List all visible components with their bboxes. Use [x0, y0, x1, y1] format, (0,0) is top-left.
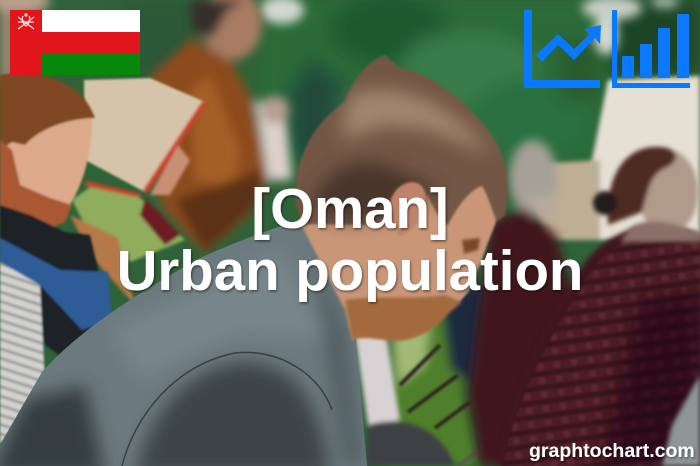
- foreground man: ear: [390, 182, 425, 236]
- watermark: graphtochart.com: [529, 440, 695, 462]
- background: grey sleeve bottom right: [662, 375, 700, 466]
- foreground man: face and beard: [300, 170, 501, 341]
- background: grass and chairs: [380, 285, 500, 466]
- background figure: red-haired man: [0, 73, 112, 445]
- icon: Omani emblem: [18, 14, 34, 29]
- background figure: woven bundle with red trim: [70, 78, 205, 305]
- flag of Oman: [10, 10, 140, 75]
- icon: bar chart: [612, 10, 690, 88]
- decorative chair rails: [400, 345, 440, 385]
- foreground man: grey coat: [0, 222, 367, 466]
- icon: line chart: [524, 10, 601, 88]
- title line 2: Urban population: [117, 239, 583, 302]
- background figure: head with dark hair: [593, 147, 700, 242]
- title: [117, 177, 583, 302]
- background figure: man in orange coat: [150, 0, 292, 254]
- background: white shirt and dark bag: [355, 328, 455, 466]
- foreground man: hair: [295, 55, 508, 225]
- background: white tent: [520, 76, 700, 240]
- background figure: grey-haired person: [468, 140, 575, 466]
- background figure: seated person in maroon knit: [498, 147, 700, 466]
- title line 1: [Oman]: [251, 177, 449, 240]
